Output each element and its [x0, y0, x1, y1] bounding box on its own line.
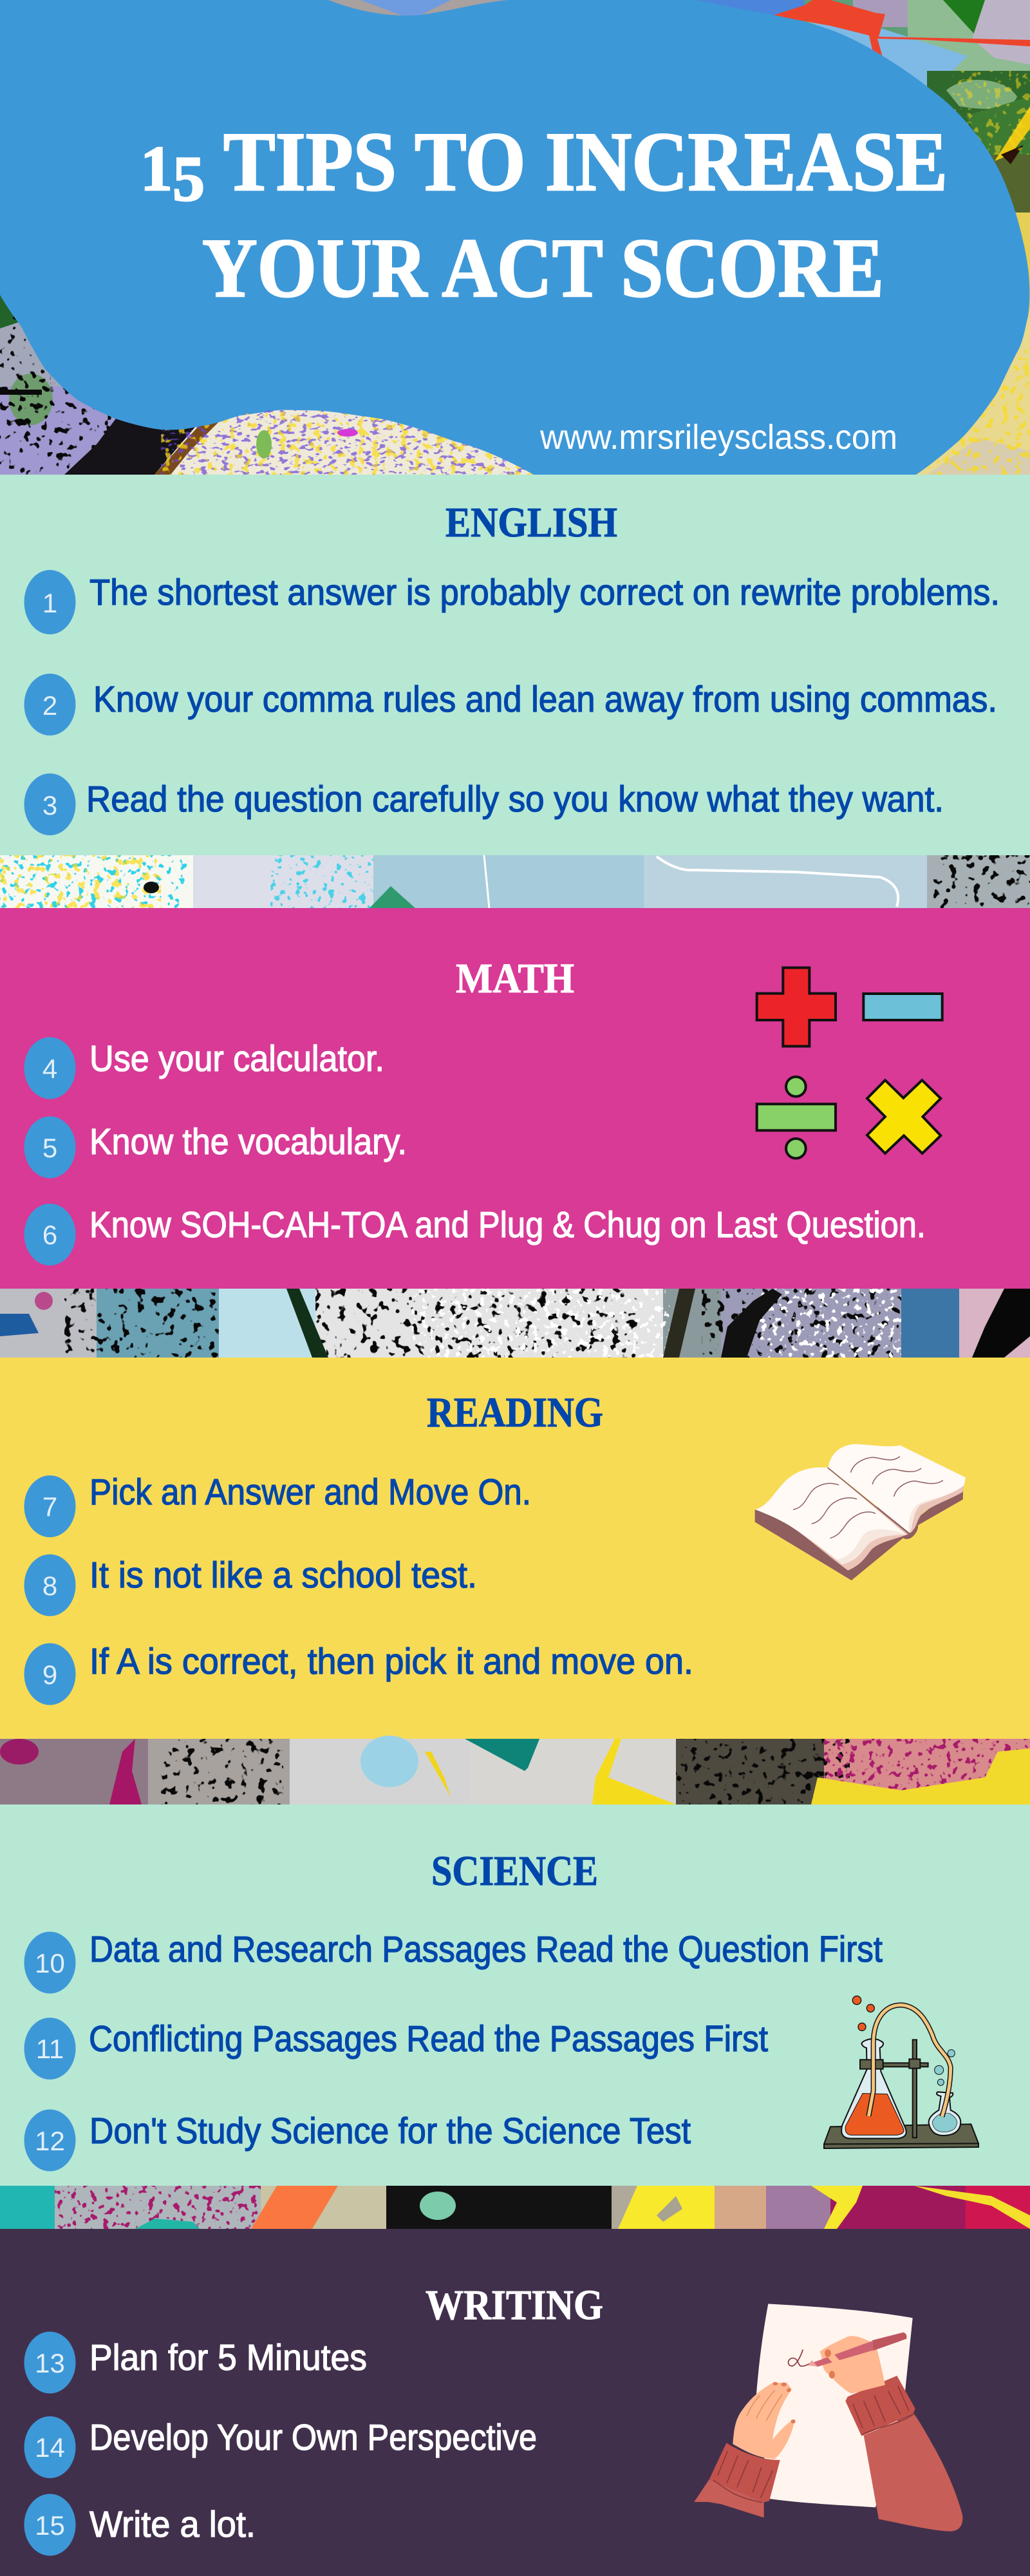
- tip 8: It is not like a school test.: [89, 1555, 477, 1596]
- left arm: [694, 2382, 796, 2517]
- icon: open book: [755, 1444, 966, 1580]
- panel: writing: [0, 2229, 1030, 2576]
- tip 11: Conflicting Passages Read the Passages First: [89, 2018, 768, 2060]
- tip 5: [24, 1117, 407, 1179]
- tip 14: Develop Your Own Perspective: [89, 2417, 537, 2458]
- title: YOUR ACT SCORE: [202, 222, 884, 315]
- tip 13: Plan for 5 Minutes: [89, 2337, 367, 2378]
- heading: math: MATH: [456, 955, 574, 1002]
- tip 5: Know the vocabulary.: [89, 1121, 407, 1162]
- tip 12: Don't Study Science for the Science Test: [89, 2110, 691, 2152]
- blue header blob: [0, 0, 1029, 475]
- tip 6: [24, 1204, 926, 1265]
- decorative band 3: [0, 1736, 1030, 1804]
- tip 7: 7: [42, 1492, 57, 1522]
- header background: paint splatter: [0, 0, 1030, 475]
- tip 3: [24, 773, 944, 835]
- panel: english: [0, 475, 1030, 855]
- tip 12: [24, 2110, 691, 2172]
- decorative band 4: [0, 2186, 1030, 2229]
- tip 6: 6: [42, 1220, 57, 1250]
- icon: plus: [757, 968, 836, 1046]
- tip 15: Write a lot.: [89, 2504, 256, 2545]
- tip 4: Use your calculator.: [89, 1038, 384, 1079]
- tip 4: 4: [42, 1054, 57, 1084]
- tip 7: [24, 1472, 531, 1537]
- tip 7: Pick an Answer and Move On.: [89, 1472, 531, 1513]
- tip 3: 3: [42, 790, 57, 820]
- tip 9: 9: [42, 1660, 57, 1690]
- heading: writing: WRITING: [426, 2282, 603, 2329]
- tip 9: If A is correct, then pick it and move on.: [89, 1641, 693, 1682]
- tip 8: 8: [42, 1571, 57, 1601]
- website url: www.mrsrileysclass.com: [539, 418, 897, 457]
- tip 10: Data and Research Passages Read the Question First: [89, 1929, 883, 1970]
- tip 13: 13: [35, 2348, 65, 2378]
- decorative band 1: [0, 855, 1030, 908]
- tip 3: Read the question carefully so you know what they want.: [86, 779, 944, 820]
- title: 1: [140, 133, 173, 204]
- tip 4: [24, 1037, 384, 1099]
- tip 14: [24, 2416, 537, 2478]
- title: TIPS TO INCREASE: [223, 115, 948, 209]
- tip 10: [24, 1929, 883, 1994]
- tip 2: [24, 674, 997, 735]
- panel: reading: [0, 1358, 1030, 1739]
- tip 6: Know SOH-CAH-TOA and Plug & Chug on Last Question.: [89, 1204, 926, 1245]
- icon: times: [867, 1080, 941, 1153]
- tip 1: 1: [42, 588, 57, 618]
- title: [140, 115, 948, 315]
- icon: divide: [757, 1077, 836, 1159]
- tip 1: [24, 570, 1000, 634]
- heading: science: SCIENCE: [431, 1848, 598, 1895]
- title: 5: [173, 143, 205, 214]
- illustration: hands writing on paper: [694, 2304, 962, 2532]
- right arm: [789, 2333, 962, 2532]
- panel: science: [0, 1804, 1030, 2186]
- icon: chemistry flasks: [824, 1996, 979, 2148]
- icon: minus: [863, 994, 942, 1020]
- paper: [756, 2304, 913, 2507]
- tip 14: 14: [35, 2432, 65, 2463]
- tip 9: [24, 1641, 693, 1705]
- heading: english: ENGLISH: [445, 499, 617, 546]
- icon: math symbols: [757, 968, 942, 1159]
- tip 12: 12: [35, 2126, 65, 2156]
- heading: reading: READING: [427, 1389, 603, 1436]
- tip 13: [24, 2331, 367, 2393]
- tip 11: [24, 2018, 768, 2079]
- tip 10: 10: [35, 1948, 65, 1978]
- tip 11: 11: [36, 2034, 64, 2064]
- tip 5: 5: [42, 1133, 57, 1163]
- tip 8: [24, 1555, 477, 1616]
- decorative band 2: [0, 1289, 1030, 1358]
- tip 2: 2: [42, 690, 57, 721]
- tip 15: [24, 2494, 256, 2555]
- panel: math: [0, 908, 1030, 1289]
- tip 15: 15: [35, 2510, 65, 2541]
